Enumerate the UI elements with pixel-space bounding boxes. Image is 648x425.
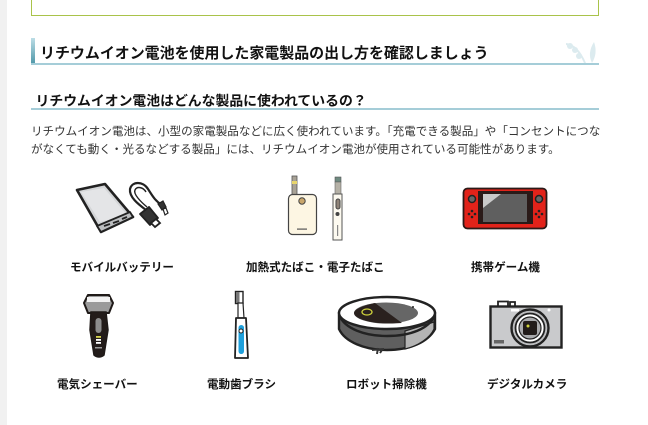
- heading underline: [31, 63, 599, 65]
- label: toothbrush: 電動歯ブラシ: [207, 379, 276, 391]
- heading accent bar: [31, 38, 35, 64]
- section heading: [31, 38, 599, 65]
- label: camera: デジタルカメラ: [487, 379, 567, 391]
- left page margin band: [0, 0, 7, 425]
- sub heading underline: [31, 108, 599, 110]
- label: game console: 携帯ゲーム機: [471, 262, 540, 274]
- heading text: リチウムイオン電池を使用した家電製品の出し方を確認しましょう: [40, 45, 489, 62]
- label: shaver: 電気シェーバー: [57, 379, 138, 391]
- body paragraph: リチウムイオン電池は、小型の家電製品などに広く使われています。「充電できる製品」や「コンセントにつな: [31, 126, 600, 138]
- green outlined box: [31, 0, 599, 16]
- label: mobile battery: モバイルバッテリー: [70, 262, 174, 274]
- sub heading text: リチウムイオン電池はどんな製品に使われているの？: [36, 92, 367, 108]
- body paragraph: がなくても動く・光るなどする製品」には、リチウムイオン電池が使用されている可能性があります。: [31, 144, 560, 156]
- heading decoration: lily of the valley: [566, 42, 596, 63]
- body paragraph: [31, 125, 600, 156]
- label: heated and electronic cigarettes: 加熱式たばこ・電子たばこ: [246, 262, 385, 274]
- label: robot vacuum: ロボット掃除機: [346, 379, 427, 391]
